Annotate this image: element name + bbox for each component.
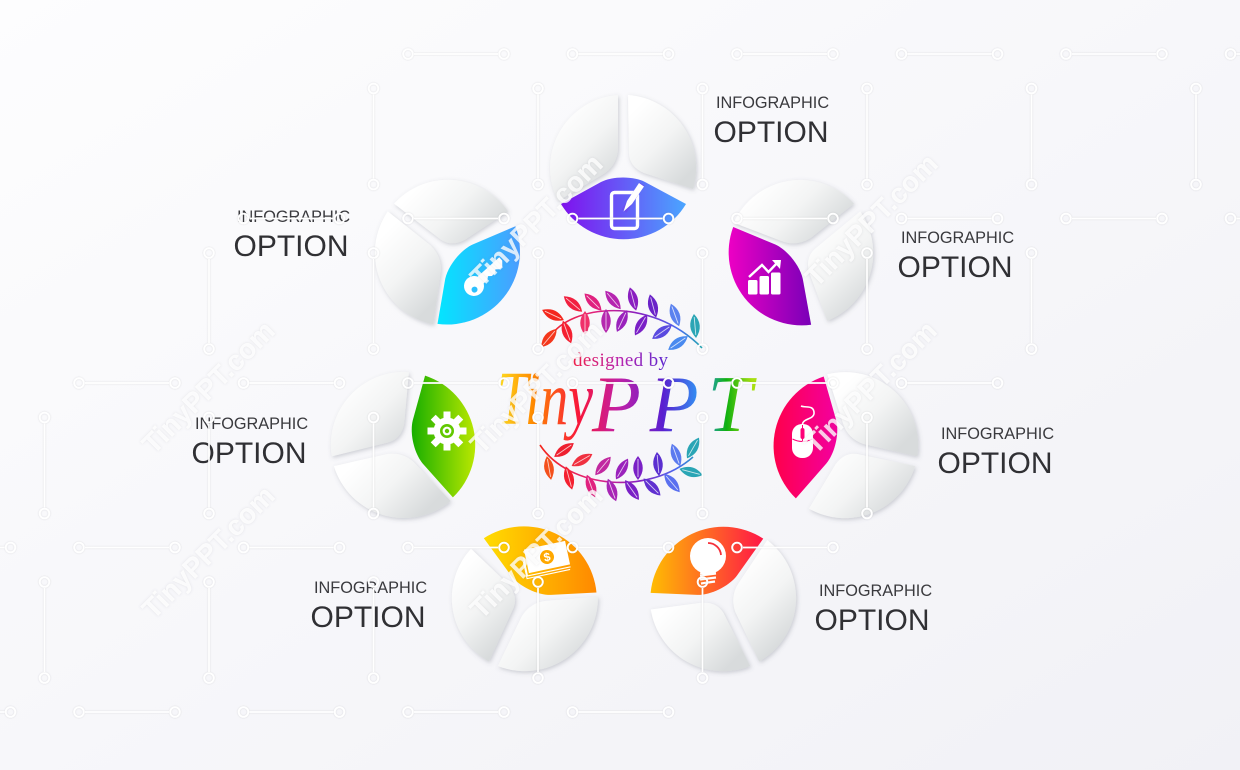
watermarks: TinyPPT.com	[799, 148, 944, 293]
label 5	[310, 579, 427, 634]
pie 7: upper left, key	[345, 150, 543, 346]
centre logo: TinyPPT wreath	[497, 286, 758, 503]
icon: banknotes: $	[542, 550, 552, 565]
icon: computer mouse	[792, 406, 814, 458]
icon: tablet and pencil	[612, 183, 644, 228]
label 5: OPTION	[310, 601, 426, 634]
coloured segment	[761, 369, 850, 504]
coloured segment	[417, 210, 543, 346]
label 1	[714, 94, 829, 149]
label 7	[234, 208, 350, 263]
watermarks: TinyPPT.com	[136, 315, 281, 460]
label 7: INFOGRAPHIC	[237, 208, 350, 226]
label 6: INFOGRAPHIC	[195, 415, 308, 433]
white segments	[345, 150, 510, 331]
pie 6: left, gear	[317, 368, 487, 532]
pie 2: upper right, chart	[706, 150, 903, 347]
coloured segment	[561, 178, 686, 239]
label 2: INFOGRAPHIC	[901, 229, 1014, 247]
coloured segment	[706, 210, 832, 347]
label 1: OPTION	[714, 116, 829, 149]
white segments	[729, 150, 903, 323]
watermarks: TinyPPT.com	[136, 480, 281, 625]
watermarks: TinyPPT.com	[464, 480, 609, 625]
coloured segment	[635, 507, 775, 617]
label 1: INFOGRAPHIC	[716, 94, 829, 112]
icon: key	[460, 253, 509, 300]
designed by: designed by	[573, 350, 668, 371]
top wreath	[538, 286, 702, 354]
coloured segment	[472, 506, 612, 616]
pie 4: bottom right, light bulb	[635, 507, 820, 696]
label 4: INFOGRAPHIC	[819, 582, 932, 600]
white segments	[317, 369, 452, 532]
pie 5: bottom left, money	[427, 506, 612, 695]
bottom wreath	[540, 435, 704, 503]
coloured segment	[399, 368, 487, 503]
label 2	[898, 229, 1014, 284]
label 3	[938, 425, 1054, 480]
label 7: OPTION	[234, 230, 349, 263]
TinyPPT script wordmark: PPT	[591, 361, 758, 449]
label 6: OPTION	[192, 437, 307, 470]
label 6	[192, 415, 308, 470]
label 4: OPTION	[814, 604, 930, 637]
TinyPPT script wordmark: Tiny	[497, 357, 593, 441]
TinyPPT script wordmark	[497, 357, 758, 449]
label 3: OPTION	[938, 447, 1053, 480]
label 5: INFOGRAPHIC	[314, 579, 427, 597]
label 2: OPTION	[898, 251, 1013, 284]
icon: light bulb	[690, 538, 726, 584]
watermarks: TinyPPT.com	[464, 148, 609, 293]
icon: gear	[419, 403, 475, 459]
icon: banknotes	[521, 541, 571, 579]
white segments	[648, 537, 820, 696]
label 4	[814, 582, 932, 637]
white segments	[427, 547, 605, 695]
pie 1: top, tablet	[550, 95, 696, 239]
watermarks: TinyPPT.com	[464, 315, 609, 460]
icon: bar chart with arrow	[748, 260, 781, 294]
watermarks	[136, 148, 944, 625]
watermarks: TinyPPT.com	[798, 315, 943, 460]
white segments	[550, 95, 696, 201]
label 3: INFOGRAPHIC	[941, 425, 1054, 443]
pie 3: right, mouse	[761, 367, 932, 533]
white segments	[808, 367, 932, 533]
